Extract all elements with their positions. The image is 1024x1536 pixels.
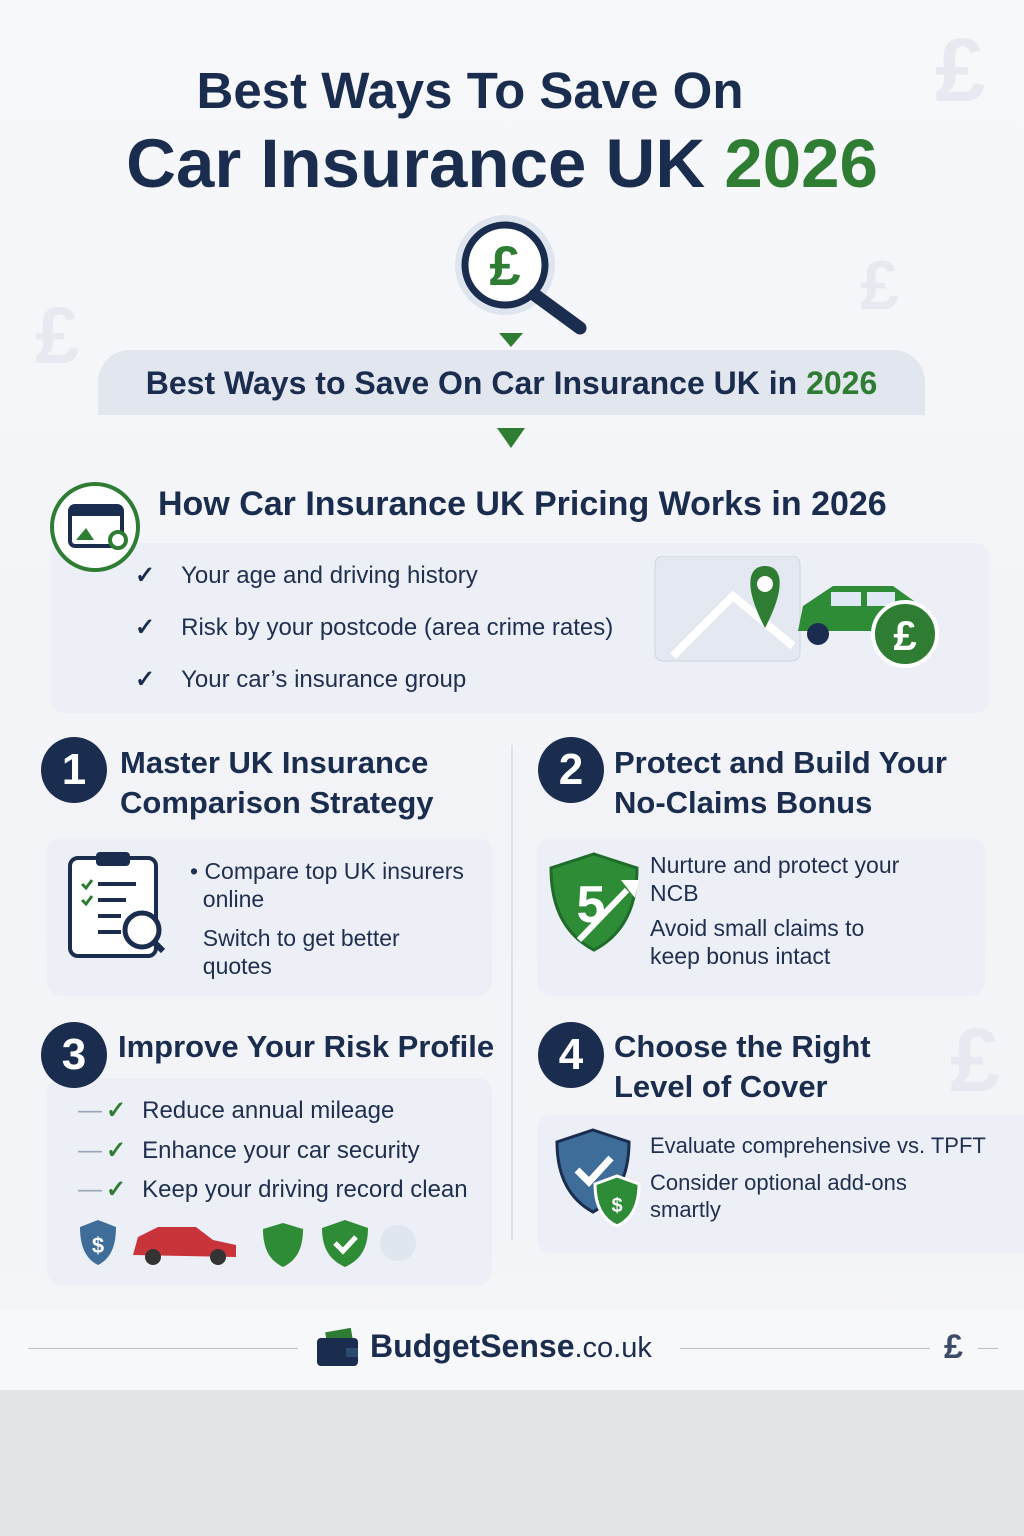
checklist [78, 1097, 468, 1203]
text: Avoid small claims to [650, 915, 864, 941]
number 4 [538, 1022, 604, 1088]
illustration: map car: £ [893, 612, 917, 659]
divider [511, 745, 513, 1240]
number 4: 4 [559, 1030, 583, 1079]
text [190, 858, 464, 979]
number 1: 1 [62, 745, 86, 794]
heading: How Car Insurance UK Pricing Works in 2026 [158, 485, 887, 523]
heading [120, 745, 434, 820]
section: pricing [50, 482, 939, 693]
checklist: —✓ Reduce annual mileage [78, 1097, 394, 1124]
icon: magnifier pound: £ [489, 234, 521, 297]
panel [537, 838, 985, 996]
heading: No-Claims Bonus [614, 785, 872, 820]
illustration: map car [654, 556, 939, 668]
text: online [203, 886, 264, 912]
icon: clipboard [68, 852, 166, 958]
text: £ [860, 246, 899, 324]
pricing panel [50, 543, 990, 713]
text [650, 852, 899, 969]
checklist: —✓ Keep your driving record clean [78, 1176, 468, 1203]
text: smartly [650, 1197, 721, 1222]
text: Evaluate comprehensive vs. TPFT [650, 1133, 986, 1158]
text: Switch to get better [203, 925, 400, 951]
heading [614, 1029, 871, 1104]
icon: shields: $ [611, 1195, 623, 1217]
section 3 [41, 1022, 494, 1267]
icon: magnifier pound [455, 215, 586, 334]
checklist: ✓ Your car’s insurance group [135, 666, 466, 693]
icon row: $ [92, 1233, 104, 1258]
number 1 [41, 737, 107, 803]
pound mark: £ [944, 1328, 963, 1366]
text: £ [935, 21, 985, 121]
title: Car Insurance UK 2026 [126, 125, 878, 202]
number 3: 3 [62, 1030, 86, 1079]
checklist: ✓ Your age and driving history [135, 562, 478, 589]
heading: Comparison Strategy [120, 785, 434, 820]
number 3 [41, 1022, 107, 1088]
heading [614, 745, 947, 820]
heading: Level of Cover [614, 1069, 828, 1104]
panel [537, 1115, 1024, 1253]
icon: shield 5: 5 [577, 876, 605, 934]
icon row [80, 1220, 416, 1267]
text: £ [35, 291, 80, 380]
heading: Improve Your Risk Profile [118, 1029, 494, 1064]
banner: Best Ways to Save On Car Insurance UK in 2026 [146, 365, 877, 401]
checklist [135, 562, 613, 693]
section 1 [41, 737, 464, 979]
text: Consider optional add-ons [650, 1170, 907, 1195]
icon: shields [556, 1128, 640, 1228]
number 2 [538, 737, 604, 803]
text: quotes [203, 953, 272, 979]
checklist: —✓ Enhance your car security [78, 1136, 420, 1164]
title: Best Ways To Save On [196, 62, 744, 119]
icon: wallet [317, 1328, 358, 1366]
text: £ [950, 1011, 1000, 1111]
title [126, 62, 878, 202]
section 2 [538, 737, 947, 969]
arrow [497, 428, 525, 448]
text: • Compare top UK insurers [190, 858, 464, 884]
heading: Choose the Right [614, 1029, 871, 1064]
text: keep bonus intact [650, 943, 830, 969]
heading: Master UK Insurance [120, 745, 428, 780]
heading: Protect and Build Your [614, 745, 947, 780]
text: NCB [650, 880, 699, 906]
logo: BudgetSense.co.uk [370, 1328, 652, 1364]
icon: shield 5 [550, 852, 639, 952]
panel [47, 1078, 492, 1285]
panel [47, 838, 492, 996]
section 4 [538, 1022, 986, 1228]
number 2: 2 [559, 745, 583, 794]
banner [98, 350, 925, 415]
arrow [499, 333, 523, 347]
text [650, 1133, 986, 1222]
text: Nurture and protect your [650, 852, 899, 878]
icon: card [50, 482, 140, 572]
checklist: ✓ Risk by your postcode (area crime rates) [135, 614, 613, 641]
footer [0, 1310, 1024, 1390]
